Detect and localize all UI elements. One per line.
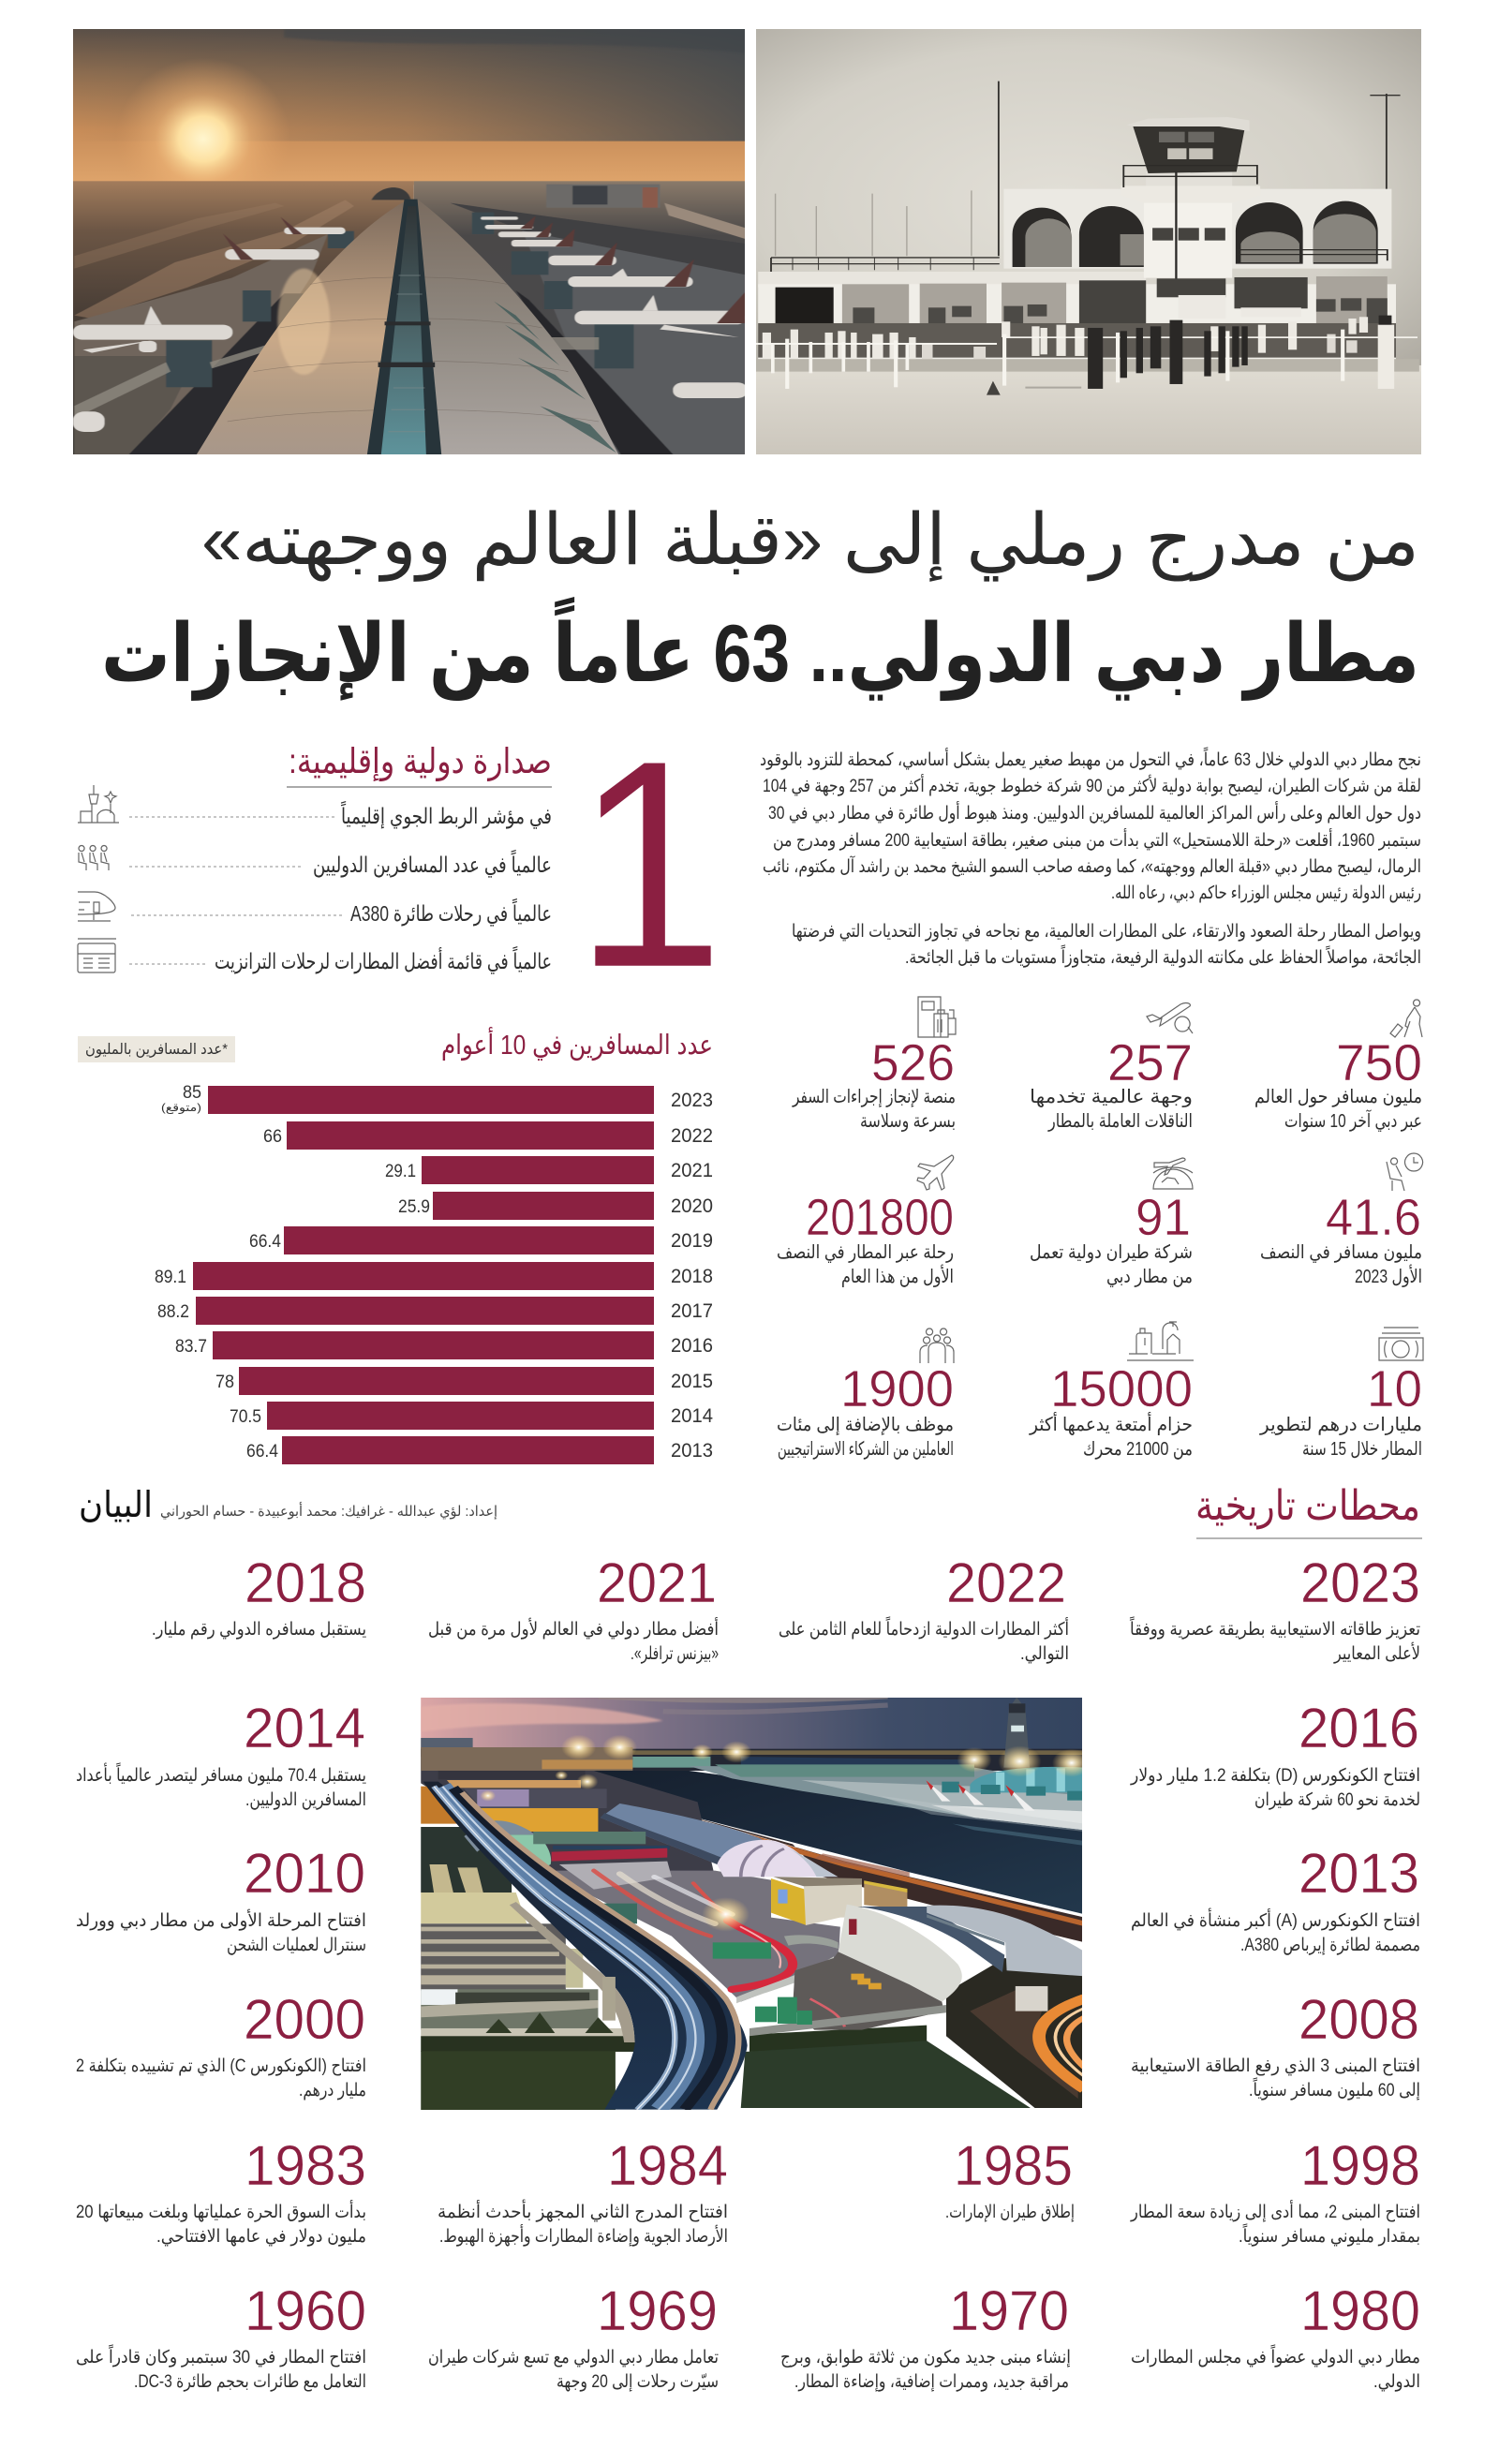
milestone 2013 — [1131, 1842, 1420, 1956]
bar 2015: 78 — [215, 1373, 234, 1392]
milestone 1980: 1980 — [1300, 2279, 1420, 2342]
stat: 526 check-in platforms: منصة لإنجاز إجراءات السفر — [792, 1087, 956, 1108]
bar 2020 — [398, 1192, 713, 1220]
milestone 2014: 2014 — [244, 1697, 365, 1759]
text block: introduction: سبتمبر 1960، أقلعت «رحلة اللامستحيل» التي بدأت من مبنى صغير، بطاقة استيعابية 200 مسافر ومدرج من — [773, 828, 1421, 851]
stat: 1900 employees: العاملين من الشركاء الاستراتيجيين — [778, 1439, 954, 1460]
bar 2017 — [157, 1297, 713, 1325]
milestone 1969 — [428, 2279, 719, 2393]
milestone 2016: 2016 — [1299, 1697, 1419, 1759]
milestone 2008: إلى 60 مليون مسافر سنوياً. — [1249, 2077, 1420, 2101]
stat: 750 million passengers: عبر دبي آخر 10 سنوات — [1284, 1108, 1422, 1133]
stat: 15000 baggage belts: 15000 — [1050, 1359, 1193, 1418]
big number one: 1 — [573, 698, 725, 1031]
milestone 2018 — [152, 1551, 366, 1640]
text block: introduction: نجح مطار دبي الدولي خلال 63 عاماً، في التحول من مهبط صغير يعمل بشكل أساسي، كمحطة للتزود بالوقود — [760, 747, 1421, 770]
milestone 1969: سيّرت رحلات إلى 20 وجهة — [557, 2372, 719, 2393]
stat: 10 billion dirhams — [1259, 1328, 1423, 1460]
bar 2023: 2023 — [671, 1090, 713, 1111]
bar 2023 — [161, 1083, 713, 1115]
bar 2019: 66.4 — [249, 1232, 281, 1252]
milestone 1984: 1984 — [607, 2134, 728, 2197]
stat: 15000 baggage belts — [1029, 1322, 1194, 1460]
milestone 2022: أكثر المطارات الدولية ازدحاماً للعام الثامن على — [779, 1616, 1069, 1640]
icon: aircraft nose — [78, 892, 115, 921]
stat: 257 destinations — [1030, 1003, 1193, 1132]
bar 2022: 66 — [263, 1127, 282, 1147]
milestone 2022: التوالي. — [1020, 1644, 1069, 1664]
milestone 1960: افتتاح المطار في 30 سبتمبر وكان قادراً على — [76, 2344, 366, 2368]
stat: 526 check-in platforms — [792, 997, 956, 1132]
bar 2021: 29.1 — [385, 1162, 416, 1181]
newspaper logo: البيان — [79, 1484, 153, 1525]
milestone 1984: الأرصاد الجوية وإضاءة المطارات وأجهزة الهبوط. — [439, 2224, 728, 2248]
text block: introduction — [760, 747, 1421, 968]
stat: 257 destinations: وجهة عالمية تخدمها — [1030, 1087, 1193, 1107]
bar 2022 — [263, 1121, 713, 1150]
stat: 15000 baggage belts: من 21000 محرك — [1083, 1439, 1193, 1460]
note: unit — [78, 1036, 235, 1062]
milestone 2010: 2010 — [244, 1842, 365, 1905]
bar 2014 — [230, 1402, 713, 1430]
bar 2022: 2022 — [671, 1125, 713, 1147]
milestone 1970: إنشاء مبنى جديد مكون من ثلاثة طوابق، وبرج — [780, 2348, 1071, 2368]
chart title: عدد المسافرين في 10 أعوام — [441, 1026, 713, 1061]
milestone 1970 — [780, 2279, 1071, 2393]
milestone 2022 — [779, 1551, 1069, 1664]
panel: international leadership — [78, 698, 725, 1031]
milestone 1970: 1970 — [949, 2279, 1069, 2342]
stat: 1900 employees: 1900 — [840, 1359, 954, 1418]
milestone 1985: 1985 — [954, 2134, 1073, 2197]
milestone 1960 — [76, 2279, 366, 2392]
note: unit: *عدد المسافرين بالمليون — [85, 1042, 228, 1059]
stat: 91 airlines: من مطار دبي — [1106, 1267, 1193, 1288]
stat: 257 destinations: الناقلات العاملة بالمطار — [1047, 1111, 1193, 1132]
bar 2021 — [385, 1156, 713, 1184]
milestone 1984: افتتاح المدرج الثاني المجهز بأحدث أنظمة — [438, 2199, 728, 2222]
stat: 91 airlines: 91 — [1135, 1188, 1191, 1246]
bar chart: passengers over 10 years — [78, 1026, 713, 1464]
bar 2014: 2014 — [671, 1405, 713, 1427]
milestone 2008: 2008 — [1299, 1988, 1419, 2051]
stat: 1900 employees — [777, 1328, 954, 1460]
milestone 2021: «بيزنس ترافلر». — [631, 1644, 719, 1664]
bar 2021: 2021 — [671, 1160, 713, 1181]
bar 2019 — [249, 1226, 713, 1254]
stat: 201800 flights — [777, 1155, 954, 1287]
icon: flight board — [78, 939, 116, 972]
photo: historic black and white airport terminal — [755, 29, 1428, 456]
milestone 1980: الدولي. — [1373, 2372, 1420, 2392]
bar 2016: 83.7 — [175, 1337, 207, 1357]
milestone 1970: مراقبة جديد، وممرات إضافية، وإضاءة المطار. — [794, 2372, 1069, 2393]
stat: 10 billion dirhams: 10 — [1367, 1359, 1422, 1418]
stat: 15000 baggage belts: حزام أمتعة يدعمها أكثر — [1029, 1412, 1193, 1435]
stat: 41.6 million passengers: 41.6 — [1326, 1188, 1421, 1246]
milestone 2021: 2021 — [597, 1551, 717, 1614]
stat: 526 check-in platforms: بسرعة وسلاسة — [860, 1111, 956, 1132]
milestone 2023 — [1130, 1551, 1420, 1664]
photo: Dubai airport at night — [421, 1698, 1091, 2111]
bar 2020: 25.9 — [398, 1197, 430, 1217]
milestone 1998: افتتاح المبنى 2، مما أدى إلى زيادة سعة المطار — [1130, 2200, 1420, 2223]
milestone 2023: تعزيز طاقاته الاستيعابية بطريقة عصرية ووفقاً — [1130, 1616, 1420, 1640]
bar 2017: 2017 — [671, 1300, 713, 1322]
milestone 2018: يستقبل مسافره الدولي رقم مليار. — [152, 1620, 366, 1640]
item: international passengers: عالمياً في عدد المسافرين الدوليين — [313, 850, 552, 878]
milestone 2016: لخدمة نحو 60 شركة طيران — [1254, 1790, 1420, 1810]
timeline — [76, 1551, 1420, 2393]
milestone 1983: مليون دولار في عامها الافتتاحي. — [156, 2227, 366, 2247]
stat: 91 airlines — [1030, 1158, 1193, 1288]
bar 2015: 2015 — [671, 1371, 713, 1392]
stat: 201800 flights: الأول من هذا العام — [841, 1265, 954, 1287]
bar 2013 — [246, 1436, 713, 1464]
photo: Dubai airport concourse at sunset — [73, 29, 748, 456]
bar 2016: 2016 — [671, 1335, 713, 1357]
milestone 1983 — [76, 2134, 366, 2247]
milestone 2014: المسافرين الدوليين. — [245, 1790, 366, 1810]
bar 2014: 70.5 — [230, 1407, 261, 1427]
milestone 2000: مليار درهم. — [299, 2081, 366, 2100]
milestone 1969: 1969 — [597, 2279, 718, 2342]
item: A380 flights: عالمياً في رحلات طائرة A380 — [350, 898, 552, 927]
stat: 41.6 million passengers: الأول 2023 — [1355, 1265, 1422, 1287]
bar 2018 — [155, 1262, 713, 1290]
milestone 1984 — [438, 2134, 728, 2248]
stat: 526 check-in platforms: 526 — [871, 1033, 955, 1091]
milestone 1980: مطار دبي الدولي عضواً في مجلس المطارات — [1131, 2344, 1420, 2368]
stat: 10 billion dirhams: المطار خلال 15 سنة — [1302, 1439, 1422, 1460]
milestone 2013: افتتاح الكونكورس (A) أكبر منشأة في العالم — [1131, 1907, 1420, 1931]
icon: control tower — [78, 785, 119, 823]
stat: 257 destinations: 257 — [1107, 1033, 1193, 1091]
milestone 2021 — [428, 1551, 719, 1664]
icon: seated passengers — [79, 845, 109, 870]
milestone 1960: 1960 — [245, 2279, 366, 2342]
milestone 2023: 2023 — [1300, 1551, 1420, 1614]
bar 2013: 66.4 — [246, 1442, 278, 1462]
milestone 1985: إطلاق طيران الإمارات. — [945, 2203, 1075, 2223]
milestone 2014: يستقبل 70.4 مليون مسافر ليتصدر عالمياً بأعداد — [76, 1762, 366, 1786]
item: air connectivity: في مؤشر الربط الجوي إقليمياً — [341, 801, 552, 829]
milestone 1969: تعامل مطار دبي الدولي مع تسع شركات طيران — [428, 2348, 719, 2368]
bar 2013: 2013 — [671, 1440, 713, 1462]
heading: leadership: صدارة دولية وإقليمية: — [289, 742, 552, 781]
milestone 1985 — [945, 2134, 1075, 2223]
stat: 91 airlines: شركة طيران دولية تعمل — [1030, 1242, 1193, 1263]
milestone 1983: 1983 — [245, 2134, 366, 2197]
stat: 750 million passengers — [1254, 1000, 1422, 1133]
milestone 2016: افتتاح الكونكورس (D) بتكلفة 1.2 مليار دولار — [1130, 1766, 1420, 1786]
title line one: من مدرج رملي إلى «قبلة العالم ووجهته» — [201, 500, 1419, 582]
milestone 2010 — [76, 1842, 366, 1955]
milestone 2014 — [76, 1697, 366, 1810]
stat: 750 million passengers: مليون مسافر حول العالم — [1254, 1087, 1422, 1107]
stat: 10 billion dirhams: مليارات درهم لتطوير — [1259, 1415, 1422, 1435]
bar 2019: 2019 — [671, 1230, 713, 1252]
heading: historic milestones: محطات تاريخية — [1195, 1483, 1420, 1530]
milestone 1998: 1998 — [1300, 2134, 1420, 2197]
bar 2015 — [215, 1367, 713, 1395]
milestone 2010: افتتاح المرحلة الأولى من مطار دبي وورلد — [76, 1909, 366, 1931]
bar 2018: 2018 — [671, 1266, 713, 1287]
milestone 1983: بدأت السوق الحرة عملياتها وبلغت مبيعاتها 20 — [76, 2200, 366, 2222]
bar 2023: 85 — [183, 1083, 201, 1103]
milestone 1998: بمقدار مليوني مسافر سنوياً. — [1239, 2223, 1420, 2247]
stats grid — [777, 997, 1423, 1460]
milestone 2023: لأعلى المعايير — [1333, 1642, 1420, 1664]
milestone 1980 — [1131, 2279, 1420, 2392]
milestone 2013: 2013 — [1299, 1842, 1419, 1905]
credit line: إعداد: لؤي عبدالله - غرافيك: محمد أبوعبيدة - حسام الحوراني — [160, 1502, 497, 1521]
title line two: مطار دبي الدولي.. 63 عاماً من الإنجازات — [101, 597, 1419, 702]
stat: 1900 employees: موظف بالإضافة إلى مئات — [777, 1415, 954, 1436]
milestone 2008: افتتاح المبنى 3 الذي رفع الطاقة الاستيعابية — [1131, 2056, 1420, 2076]
milestone 2013: مصممة لطائرة إيرباص A380. — [1240, 1936, 1420, 1956]
stat: 201800 flights: رحلة عبر المطار في النصف — [777, 1242, 954, 1264]
credits and logo — [79, 1484, 497, 1525]
bar 2020: 2020 — [671, 1195, 713, 1217]
milestone 2008 — [1131, 1988, 1420, 2101]
stat: 41.6 million passengers — [1260, 1153, 1423, 1287]
bar 2018: 89.1 — [155, 1268, 186, 1287]
milestone 2022: 2022 — [946, 1551, 1066, 1614]
stat: 201800 flights: 201800 — [806, 1188, 954, 1246]
milestone 2018: 2018 — [245, 1551, 366, 1614]
milestone 2000: 2000 — [244, 1988, 365, 2051]
milestone 2016 — [1130, 1697, 1420, 1810]
stat: 750 million passengers: 750 — [1336, 1033, 1422, 1091]
text block: introduction: لقلة من شركات الطيران، ليصبح بوابة دولية لأكثر من 90 شركة خطوط جوية، تخدم أكثر من 257 وجهة في 104 — [763, 774, 1421, 796]
milestone 2021: أفضل مطار دولي في العالم لأول مرة من قبل — [428, 1617, 719, 1640]
milestone 1960: التعامل مع طائرات بحجم طائرة DC-3. — [134, 2372, 366, 2392]
milestone 2000 — [76, 1988, 366, 2100]
title — [101, 500, 1419, 702]
milestone 2010: سنترال لعمليات الشحن — [227, 1936, 366, 1955]
bar 2017: 88.2 — [157, 1302, 189, 1322]
bar 2023: (متوقع) — [161, 1101, 201, 1115]
bar 2016 — [175, 1331, 713, 1359]
milestone 1998 — [1130, 2134, 1420, 2247]
milestone 2000: افتتاح (الكونكورس C) الذي تم تشييده بتكلفة 2 — [76, 2056, 366, 2076]
stat: 41.6 million passengers: مليون مسافر في النصف — [1260, 1242, 1422, 1264]
item: best transit airports: عالمياً في قائمة أفضل المطارات لرحلات الترانزيت — [215, 946, 552, 974]
